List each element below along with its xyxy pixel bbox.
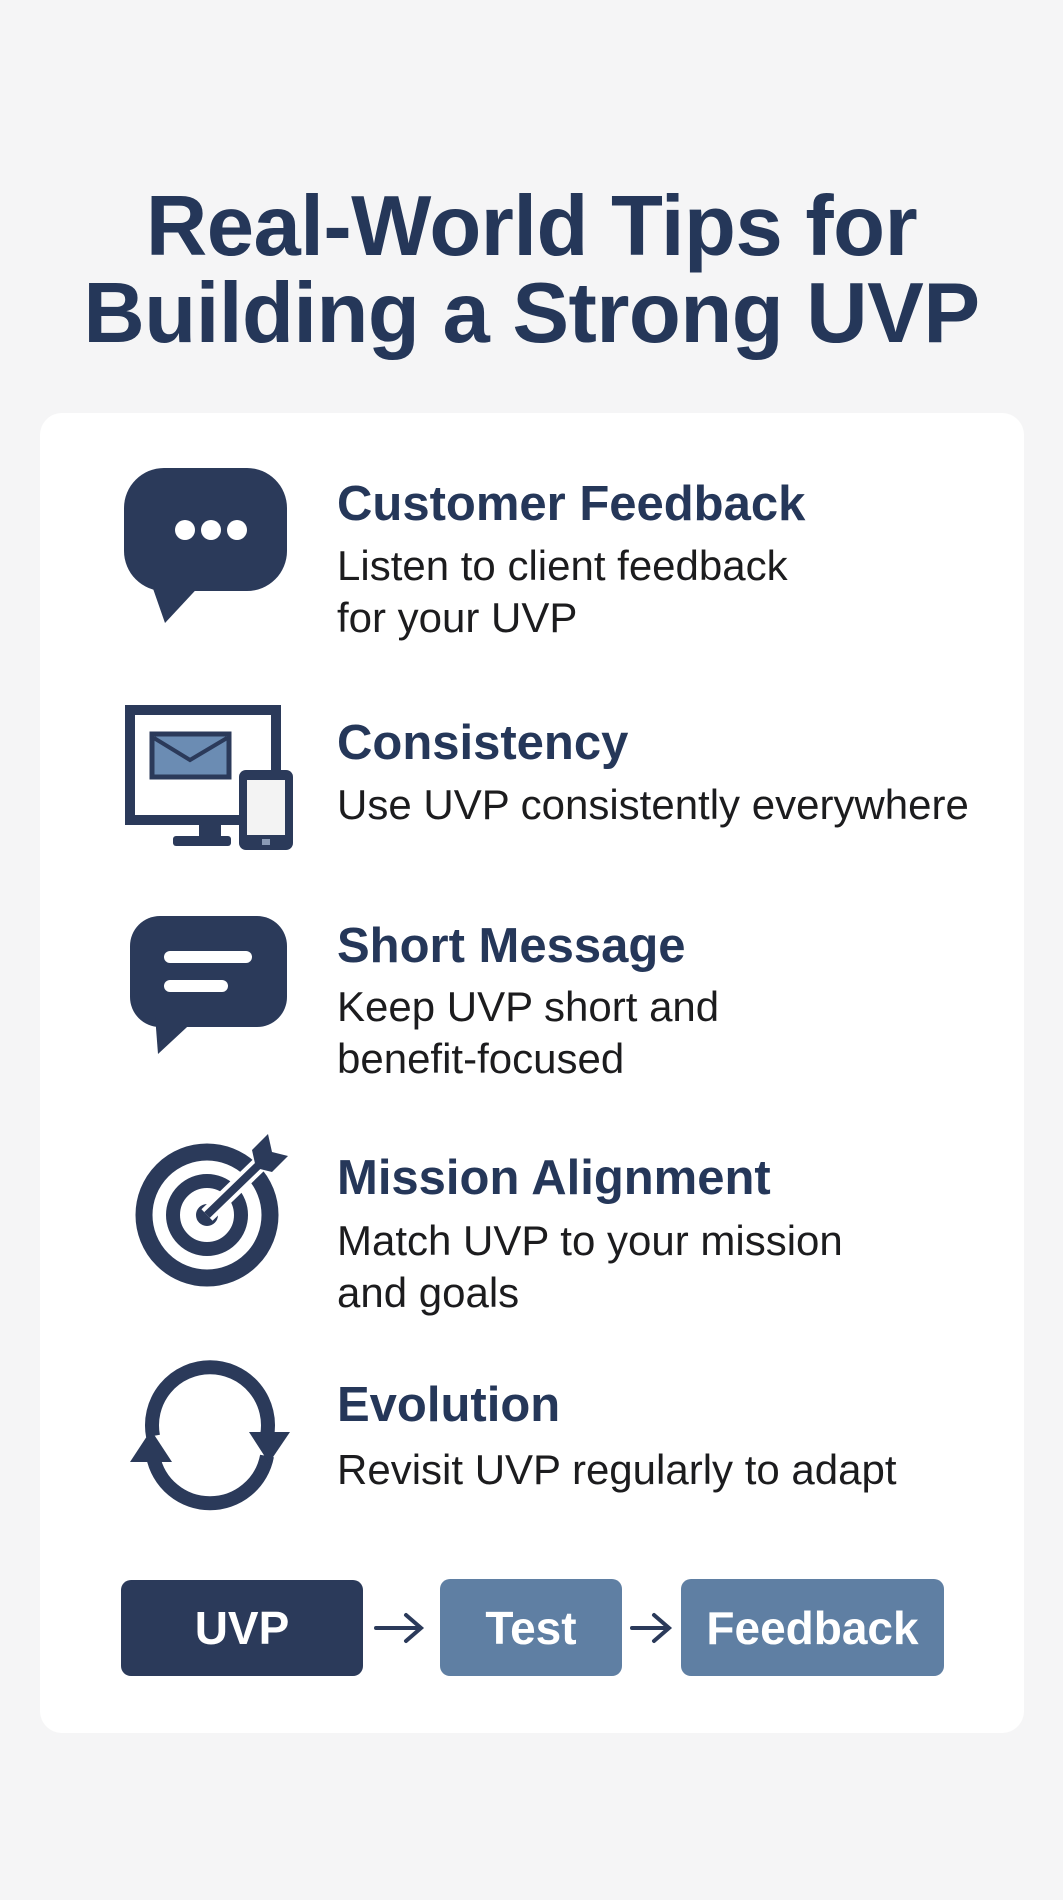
text: mission alignment	[337, 1217, 843, 1316]
heading: short message: Short Message	[337, 919, 686, 973]
heading: consistency: Consistency	[337, 716, 628, 770]
text: consistency: Use UVP consistently everywhere	[337, 781, 969, 828]
button: Test: Test	[485, 1602, 577, 1654]
text: evolution: Revisit UVP regularly to adapt	[337, 1446, 896, 1493]
panel: tips card	[40, 413, 1024, 1733]
button: UVP: UVP	[195, 1602, 289, 1654]
heading: mission alignment: Mission Alignment	[337, 1151, 771, 1205]
button: Feedback	[681, 1579, 944, 1676]
text: customer feedback: Listen to client feedback	[337, 542, 788, 589]
arrow: UVP to Test	[374, 1612, 424, 1644]
button: Test	[440, 1579, 622, 1676]
text: mission alignment: Match UVP to your mission	[337, 1217, 843, 1264]
button: UVP	[121, 1580, 363, 1676]
text: mission alignment: and goals	[337, 1269, 519, 1316]
text: short message: Keep UVP short and	[337, 983, 719, 1030]
heading: customer feedback: Customer Feedback	[337, 477, 805, 531]
text: customer feedback	[337, 542, 788, 641]
title: Building a Strong UVP	[83, 266, 980, 361]
text: customer feedback: for your UVP	[337, 594, 577, 641]
arrow: Test to Feedback	[630, 1612, 672, 1644]
button: Feedback: Feedback	[706, 1602, 919, 1654]
text: short message: benefit-focused	[337, 1035, 624, 1082]
heading: evolution: Evolution	[337, 1378, 560, 1432]
title	[83, 179, 980, 361]
text: short message	[337, 983, 719, 1082]
title: Real-World Tips for	[146, 179, 917, 274]
